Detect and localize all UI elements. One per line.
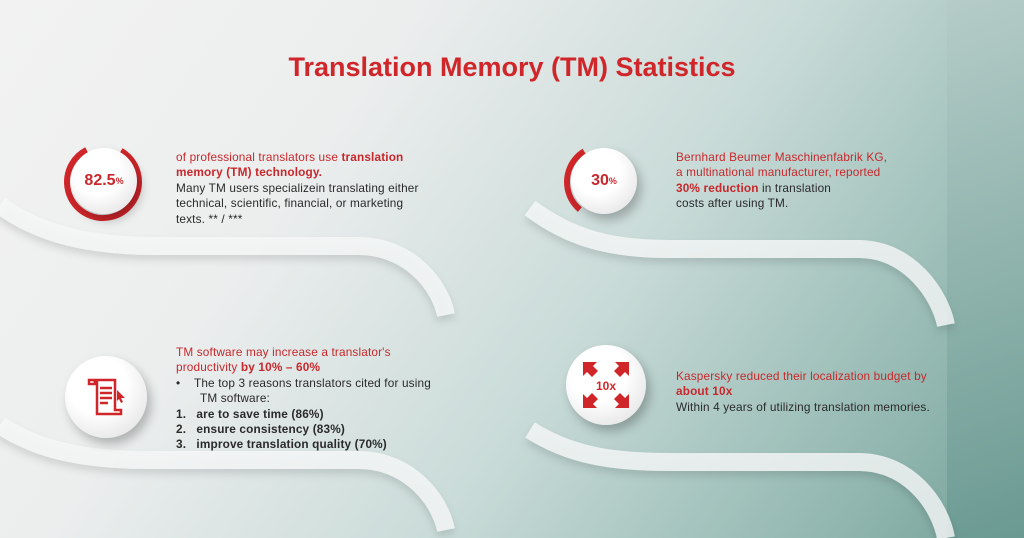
stat circle: 30%: % (609, 176, 617, 186)
stat circle: 82.5%: 82.5 (84, 172, 116, 189)
text: card 3 (176, 345, 431, 451)
icon circle: 10x arrows: 10x (596, 379, 616, 393)
stat circle: 30%: 30 (591, 172, 609, 189)
text: card 4: about 10x (676, 384, 732, 398)
icon circle: document (65, 356, 147, 438)
text: card 3: TM software: (200, 391, 270, 405)
text: card 4: Within 4 years of utilizing translation memories. (676, 400, 930, 414)
text: card 1: technical, scientific, financial, or marketing (176, 196, 403, 210)
text: card 1: texts. ** / *** (176, 212, 243, 226)
text: card 3: 1. are to save time (86%) (176, 407, 324, 421)
text: card 1: Many TM users specializein translating either (176, 181, 419, 195)
text: card 3: TM software may increase a translator's (176, 345, 391, 359)
text: card 2 (676, 150, 887, 210)
title: Translation Memory (TM) Statistics (288, 52, 736, 82)
text: card 3: • The top 3 reasons translators cited for using (176, 376, 431, 390)
stat circle: 82.5%: % (116, 176, 124, 186)
stat circle: 30% (564, 148, 646, 224)
text: card 2: 30% reduction in translation (676, 181, 831, 195)
text: card 1: of professional translators use translation (176, 150, 403, 164)
text: card 2: a multinational manufacturer, reported (676, 165, 880, 179)
text: card 3: 2. ensure consistency (83%) (176, 422, 345, 436)
text: card 4 (676, 369, 930, 414)
icon circle: 10x arrows (566, 345, 646, 425)
stat circle: 82.5% (64, 147, 146, 225)
text: card 3: productivity by 10% – 60% (176, 360, 320, 374)
text: card 2: Bernhard Beumer Maschinenfabrik KG, (676, 150, 887, 164)
text: card 2: costs after using TM. (676, 196, 788, 210)
text: card 1 (176, 150, 419, 226)
text: card 3: 3. improve translation quality (70%) (176, 437, 387, 451)
text: card 1: memory (TM) technology. (176, 165, 322, 179)
text: card 4: Kaspersky reduced their localization budget by (676, 369, 927, 383)
